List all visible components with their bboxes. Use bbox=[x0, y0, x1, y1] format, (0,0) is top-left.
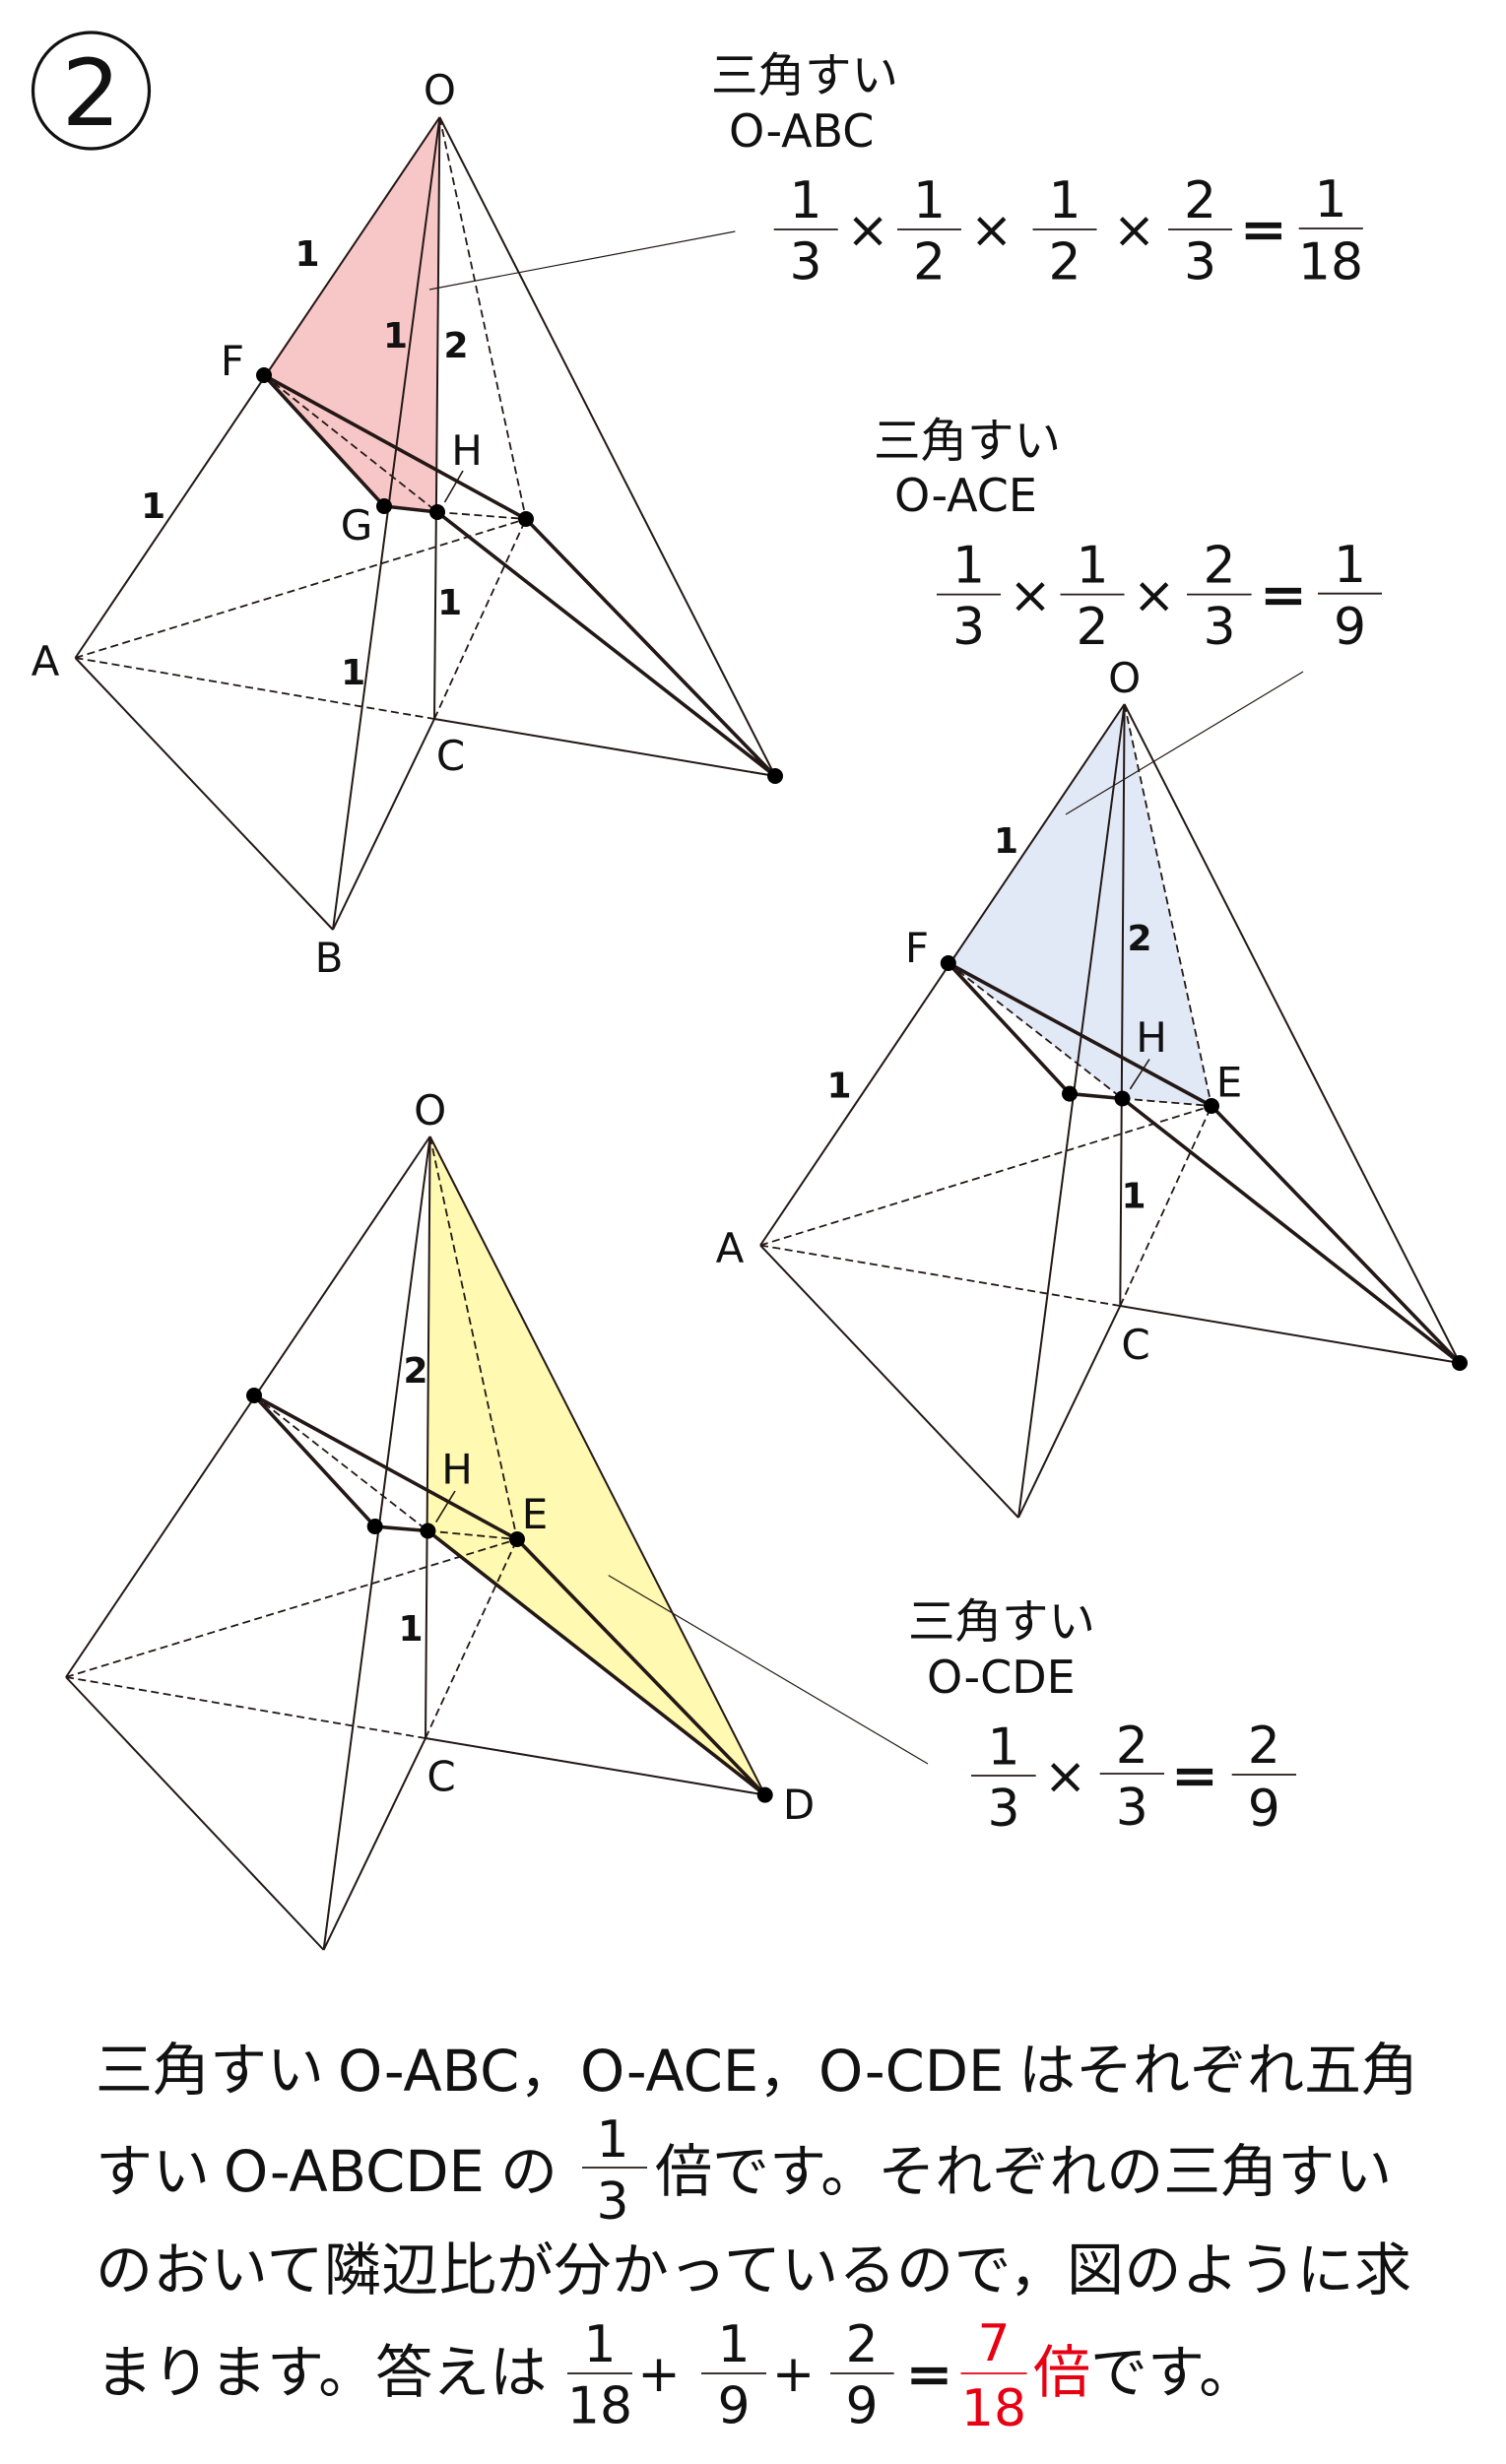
edge ratio labels bbox=[826, 821, 1152, 1217]
formula: O-ACE: = bbox=[1261, 563, 1306, 627]
edge ratio labels: 1 bbox=[994, 821, 1018, 862]
formula: O-ACE: × bbox=[1133, 566, 1175, 625]
pyramid edges bbox=[75, 117, 775, 930]
line 2: 3 bbox=[596, 2172, 629, 2232]
caption: O-CDE: O-CDE bbox=[927, 1651, 1076, 1704]
formula: O-ABC: 3 bbox=[1184, 232, 1216, 292]
shaded face O-H-D bbox=[427, 1136, 765, 1795]
formula: O-CDE bbox=[971, 1717, 1296, 1839]
edge ratio labels bbox=[398, 1351, 428, 1650]
formula: O-ACE: 1 bbox=[952, 536, 985, 595]
line 2: 1 bbox=[596, 2110, 629, 2170]
vertex labels: G bbox=[341, 501, 372, 550]
vertex labels: H bbox=[451, 426, 483, 475]
line 2: の bbox=[500, 2138, 557, 2205]
caption: O-ACE: 三角すい bbox=[874, 415, 1061, 469]
formula: O-CDE: 1 bbox=[987, 1718, 1020, 1778]
line 4: 7 bbox=[977, 2314, 1011, 2373]
formula: O-ACE: 1 bbox=[1076, 536, 1109, 595]
vertex labels: E bbox=[522, 1490, 548, 1538]
line 1: 三角すい bbox=[96, 2037, 324, 2104]
diagram: pyramid O-ABC highlighted bbox=[32, 66, 783, 982]
caption: O-ACE: O-ACE bbox=[894, 469, 1037, 522]
caption: O-ACE bbox=[874, 415, 1061, 522]
vertex labels bbox=[716, 654, 1242, 1369]
leader line: O-CDE bbox=[609, 1576, 928, 1764]
vertex labels: A bbox=[32, 637, 60, 685]
line 1: O-ACE， bbox=[580, 2039, 816, 2105]
caption: O-CDE: 三角すい bbox=[908, 1595, 1095, 1650]
line 3: のおいて隣辺比が分かっているので，図のように求 bbox=[96, 2237, 1411, 2303]
line 4: 18 bbox=[961, 2379, 1026, 2438]
vertex labels: O bbox=[424, 66, 456, 114]
formula: O-ACE: × bbox=[1009, 566, 1052, 625]
line 1: O-ABC， bbox=[338, 2039, 576, 2105]
vertex labels bbox=[32, 66, 483, 982]
line 2 bbox=[96, 2110, 1392, 2232]
edge ratio labels: 1 bbox=[437, 583, 462, 623]
formula: O-ABC: 2 bbox=[913, 232, 946, 292]
caption: O-ABC: O-ABC bbox=[729, 104, 874, 158]
line 4: です。 bbox=[1090, 2339, 1256, 2406]
vertex labels: B bbox=[315, 934, 343, 982]
formula: O-ABC: 18 bbox=[1298, 232, 1363, 292]
formula: O-ABC: × bbox=[846, 201, 889, 260]
points bbox=[256, 367, 783, 784]
formula: O-ABC: 1 bbox=[1048, 171, 1081, 230]
vertex labels: F bbox=[221, 337, 244, 385]
formula: O-ABC: 1 bbox=[913, 171, 946, 230]
leader line: O-ABC bbox=[429, 231, 735, 290]
formula: O-ACE: 3 bbox=[952, 598, 985, 657]
vertex labels: O bbox=[414, 1086, 446, 1135]
vertex labels: H bbox=[441, 1446, 473, 1494]
formula: O-CDE: 2 bbox=[1116, 1717, 1148, 1776]
line 4: 倍 bbox=[1033, 2339, 1090, 2406]
line 2: O-ABCDE bbox=[224, 2139, 485, 2205]
leader line: O-ACE bbox=[1066, 672, 1303, 814]
shaded face O-F-H-E bbox=[949, 704, 1211, 1106]
edge ratio labels: 2 bbox=[443, 326, 469, 366]
edge ratio labels: 1 bbox=[341, 653, 365, 693]
line 4: 1 bbox=[583, 2315, 617, 2374]
formula: O-ACE: 2 bbox=[1076, 598, 1109, 657]
formula: O-CDE: 2 bbox=[1248, 1717, 1280, 1776]
points bbox=[941, 955, 1468, 1371]
edge ratio labels: 1 bbox=[383, 316, 408, 357]
vertex labels: A bbox=[716, 1224, 745, 1272]
caption: O-CDE bbox=[908, 1595, 1095, 1704]
shaded face O-F-G-H bbox=[264, 117, 439, 512]
line 4: 2 bbox=[845, 2315, 879, 2374]
line 4: 9 bbox=[845, 2377, 879, 2436]
line 4: = bbox=[906, 2343, 952, 2407]
problem number badge bbox=[33, 32, 150, 149]
line 4: 9 bbox=[717, 2377, 751, 2436]
line 4: まります。答えは bbox=[96, 2339, 547, 2406]
line 1 bbox=[96, 2037, 1418, 2105]
edge ratio labels: 1 bbox=[398, 1609, 424, 1650]
formula: O-ABC: × bbox=[1113, 201, 1155, 260]
formula: O-ABC: 2 bbox=[1184, 171, 1216, 230]
edge ratio labels: 2 bbox=[1127, 919, 1152, 959]
formula: O-ABC: 3 bbox=[789, 232, 822, 292]
formula: O-CDE: 3 bbox=[1116, 1779, 1148, 1838]
edge ratio labels bbox=[141, 234, 469, 693]
formula: O-ACE: 9 bbox=[1334, 598, 1366, 657]
line 1: O-CDE bbox=[818, 2039, 1004, 2105]
vertex labels: F bbox=[905, 924, 929, 972]
pyramid edges bbox=[760, 704, 1460, 1518]
line 1: はそれぞれ五角 bbox=[1018, 2037, 1418, 2104]
pyramid edges bbox=[66, 1136, 765, 1950]
formula: O-ACE: 2 bbox=[1203, 536, 1236, 595]
formula: O-ACE: 3 bbox=[1203, 598, 1236, 657]
vertex labels: H bbox=[1136, 1013, 1167, 1062]
points bbox=[246, 1388, 773, 1803]
edge ratio labels: 1 bbox=[295, 234, 320, 275]
formula: O-CDE: 3 bbox=[987, 1780, 1020, 1839]
diagram: pyramid O-ACE highlighted bbox=[716, 654, 1468, 1518]
formula: O-ABC: 1 bbox=[1314, 170, 1347, 229]
vertex labels: O bbox=[1108, 654, 1141, 702]
vertex labels bbox=[414, 1086, 815, 1829]
line 4: 1 bbox=[717, 2315, 751, 2374]
vertex labels: E bbox=[1216, 1058, 1242, 1107]
line 4 bbox=[96, 2314, 1256, 2438]
formula: O-ABC: × bbox=[970, 201, 1013, 260]
caption: O-ABC bbox=[711, 49, 898, 158]
edge ratio labels: 1 bbox=[1121, 1177, 1146, 1217]
formula: O-CDE: × bbox=[1044, 1747, 1086, 1806]
formula: O-CDE: 9 bbox=[1248, 1780, 1280, 1839]
diagram: pyramid O-CDE highlighted bbox=[66, 1086, 815, 1950]
formula: O-ABC bbox=[774, 170, 1363, 292]
formula: O-ABC: 2 bbox=[1048, 232, 1081, 292]
edge ratio labels: 1 bbox=[826, 1066, 852, 1107]
problem number badge: 2 bbox=[62, 40, 120, 148]
line 2: 倍です。それぞれの三角すい bbox=[655, 2138, 1392, 2205]
formula: O-ACE: 1 bbox=[1334, 536, 1366, 595]
vertex labels: C bbox=[1121, 1321, 1150, 1369]
line 4: + bbox=[772, 2345, 815, 2404]
edge ratio labels: 1 bbox=[141, 486, 165, 527]
vertex labels: D bbox=[783, 1781, 815, 1829]
formula: O-ABC: 1 bbox=[789, 171, 822, 230]
formula: O-ACE bbox=[937, 536, 1382, 657]
line 4: 18 bbox=[567, 2377, 632, 2436]
formula: O-CDE: = bbox=[1172, 1744, 1217, 1808]
caption: O-ABC: 三角すい bbox=[711, 49, 898, 103]
line 4: + bbox=[637, 2345, 681, 2404]
edge ratio labels: 2 bbox=[403, 1351, 428, 1392]
vertex labels: C bbox=[426, 1753, 456, 1801]
formula: O-ABC: = bbox=[1240, 198, 1286, 262]
line 2: すい bbox=[96, 2138, 210, 2205]
explanation text bbox=[96, 2037, 1418, 2438]
vertex labels: C bbox=[436, 732, 465, 780]
